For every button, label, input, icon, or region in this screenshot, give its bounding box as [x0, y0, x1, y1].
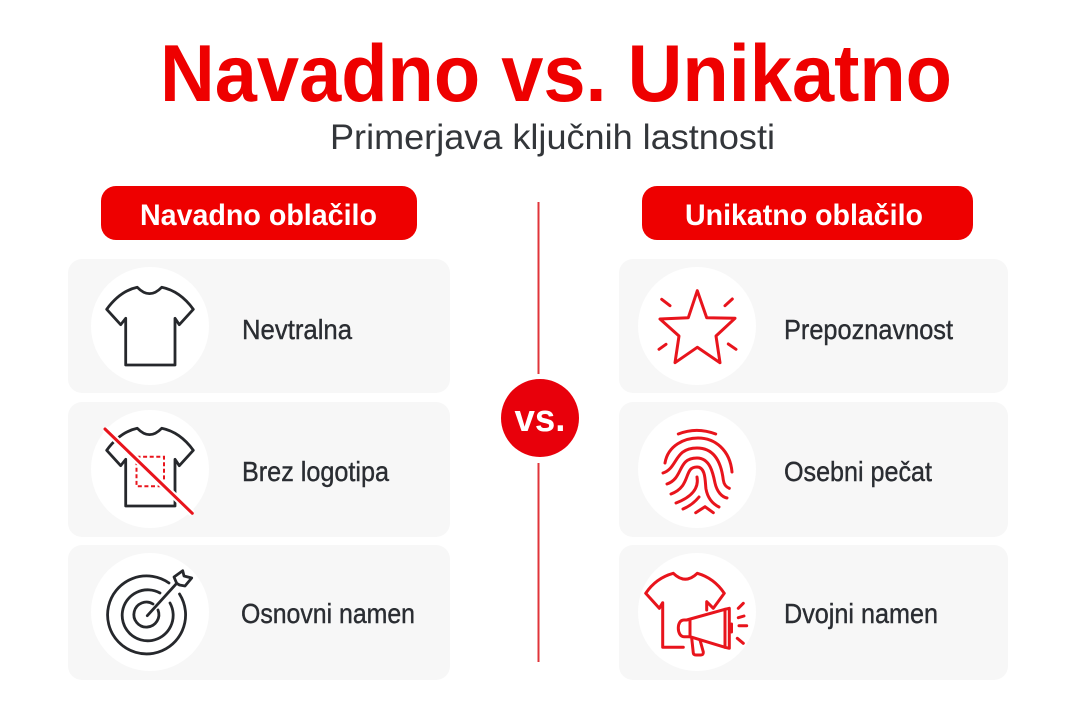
panel: Brez logotipa: [68, 402, 450, 537]
label: Osnovni namen: [241, 598, 415, 629]
center divider with vs. badge: [501, 202, 579, 662]
panel: Osnovni namen: [68, 545, 450, 680]
label: Dvojni namen: [784, 598, 938, 629]
icon: fingerprint: [663, 430, 732, 513]
right column header: [642, 186, 973, 240]
left column header: Navadno oblačilo: [140, 199, 377, 232]
icon: target with arrow: [108, 571, 192, 654]
subtitle: Primerjava ključnih lastnosti: [330, 118, 775, 157]
panel: Prepoznavnost: [619, 259, 1008, 393]
icon: t-shirt with megaphone: [646, 573, 747, 655]
panel: Osebni pečat: [619, 402, 1008, 537]
label: Osebni pečat: [784, 456, 932, 487]
label: Prepoznavnost: [784, 314, 953, 345]
icon: star with rays: [659, 291, 736, 363]
right column header: Unikatno oblačilo: [685, 199, 923, 232]
panel: Nevtralna: [68, 259, 450, 393]
icon: crossed-out t-shirt: [105, 428, 193, 513]
center divider with vs. badge: vs.: [514, 398, 566, 440]
left column header: [101, 186, 417, 240]
label: Nevtralna: [242, 314, 352, 345]
icon: t-shirt: [107, 287, 193, 365]
label: Brez logotipa: [242, 456, 389, 487]
panel: Dvojni namen: [619, 545, 1008, 680]
title: Navadno vs. Unikatno: [160, 29, 952, 119]
